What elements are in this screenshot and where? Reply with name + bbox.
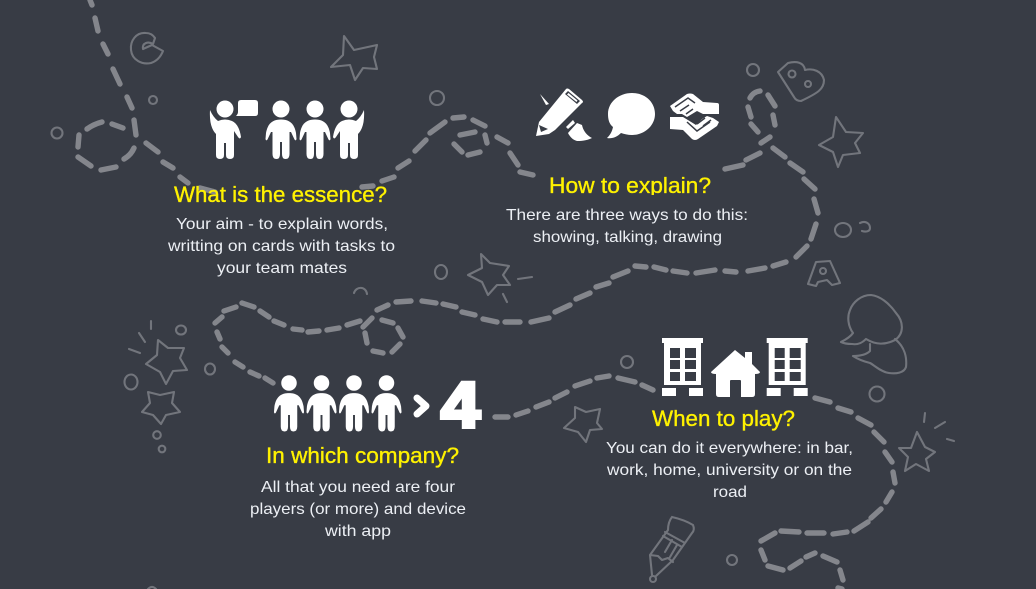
- icon: left building: [662, 338, 703, 396]
- body text: [506, 207, 748, 246]
- doodle: circles middle right: [621, 356, 884, 565]
- body text: All that you need are four: [261, 479, 456, 496]
- doodle: star top: [331, 36, 377, 80]
- heading: When to play?: [652, 406, 795, 431]
- doodle: circles lower left: [124, 326, 215, 589]
- icon: house: [711, 350, 760, 397]
- doodle: star lower right: [899, 432, 935, 471]
- body text: writting on cards with tasks to: [167, 238, 395, 255]
- body text: [167, 216, 395, 277]
- icon: four people with speech bubble: [210, 100, 364, 159]
- block: when to play: [606, 338, 853, 501]
- body text: [250, 479, 466, 540]
- icon: four people: [274, 375, 402, 432]
- block: how to explain: [506, 88, 748, 246]
- body text: road: [713, 484, 747, 501]
- doodle: star below: [142, 392, 180, 424]
- doodle: circle top right: [747, 64, 759, 76]
- doodle: spark marks lower left: [129, 321, 151, 353]
- heading: What is the essence?: [174, 182, 387, 207]
- body text: Your aim - to explain words,: [176, 216, 388, 233]
- doodle: star lower left: [146, 340, 187, 384]
- body text: showing, talking, drawing: [533, 229, 722, 246]
- dashed chalk path: [78, 0, 895, 589]
- icon: right building: [767, 338, 808, 396]
- doodle: circles right: [835, 222, 870, 237]
- icon: greater than: [417, 398, 426, 414]
- body text: There are three ways to do this:: [506, 207, 748, 224]
- heading text: How to explain?: [549, 173, 711, 198]
- body text: players (or more) and device: [250, 501, 466, 518]
- doodle: star centre: [468, 254, 510, 295]
- icon: speech bubble: [607, 93, 655, 138]
- doodle: speech bubbles: [841, 295, 906, 373]
- icon: helping hands: [670, 94, 719, 140]
- doodle: spark marks lower right: [924, 413, 954, 441]
- doodle: pencil: [650, 517, 694, 582]
- doodle: star right: [819, 117, 863, 167]
- body text: [606, 440, 853, 501]
- body text: your team mates: [217, 260, 347, 277]
- icon: pencil and brush: [536, 88, 592, 141]
- heading: In which company?: [266, 443, 459, 468]
- body text: with app: [324, 523, 391, 540]
- doodle: letter A: [808, 261, 840, 286]
- number 4: 4: [441, 369, 480, 441]
- body text: work, home, university or on the: [606, 462, 852, 479]
- doodle: small circles left: [52, 91, 447, 294]
- doodle: spark marks centre: [503, 277, 532, 302]
- doodle: heart: [778, 62, 824, 101]
- block: in which company: [250, 369, 480, 540]
- block: what is the essence: [167, 100, 395, 277]
- doodle: letter G: [131, 33, 163, 63]
- body text: You can do it everywhere: in bar,: [606, 440, 853, 457]
- doodle: star by company: [564, 407, 602, 442]
